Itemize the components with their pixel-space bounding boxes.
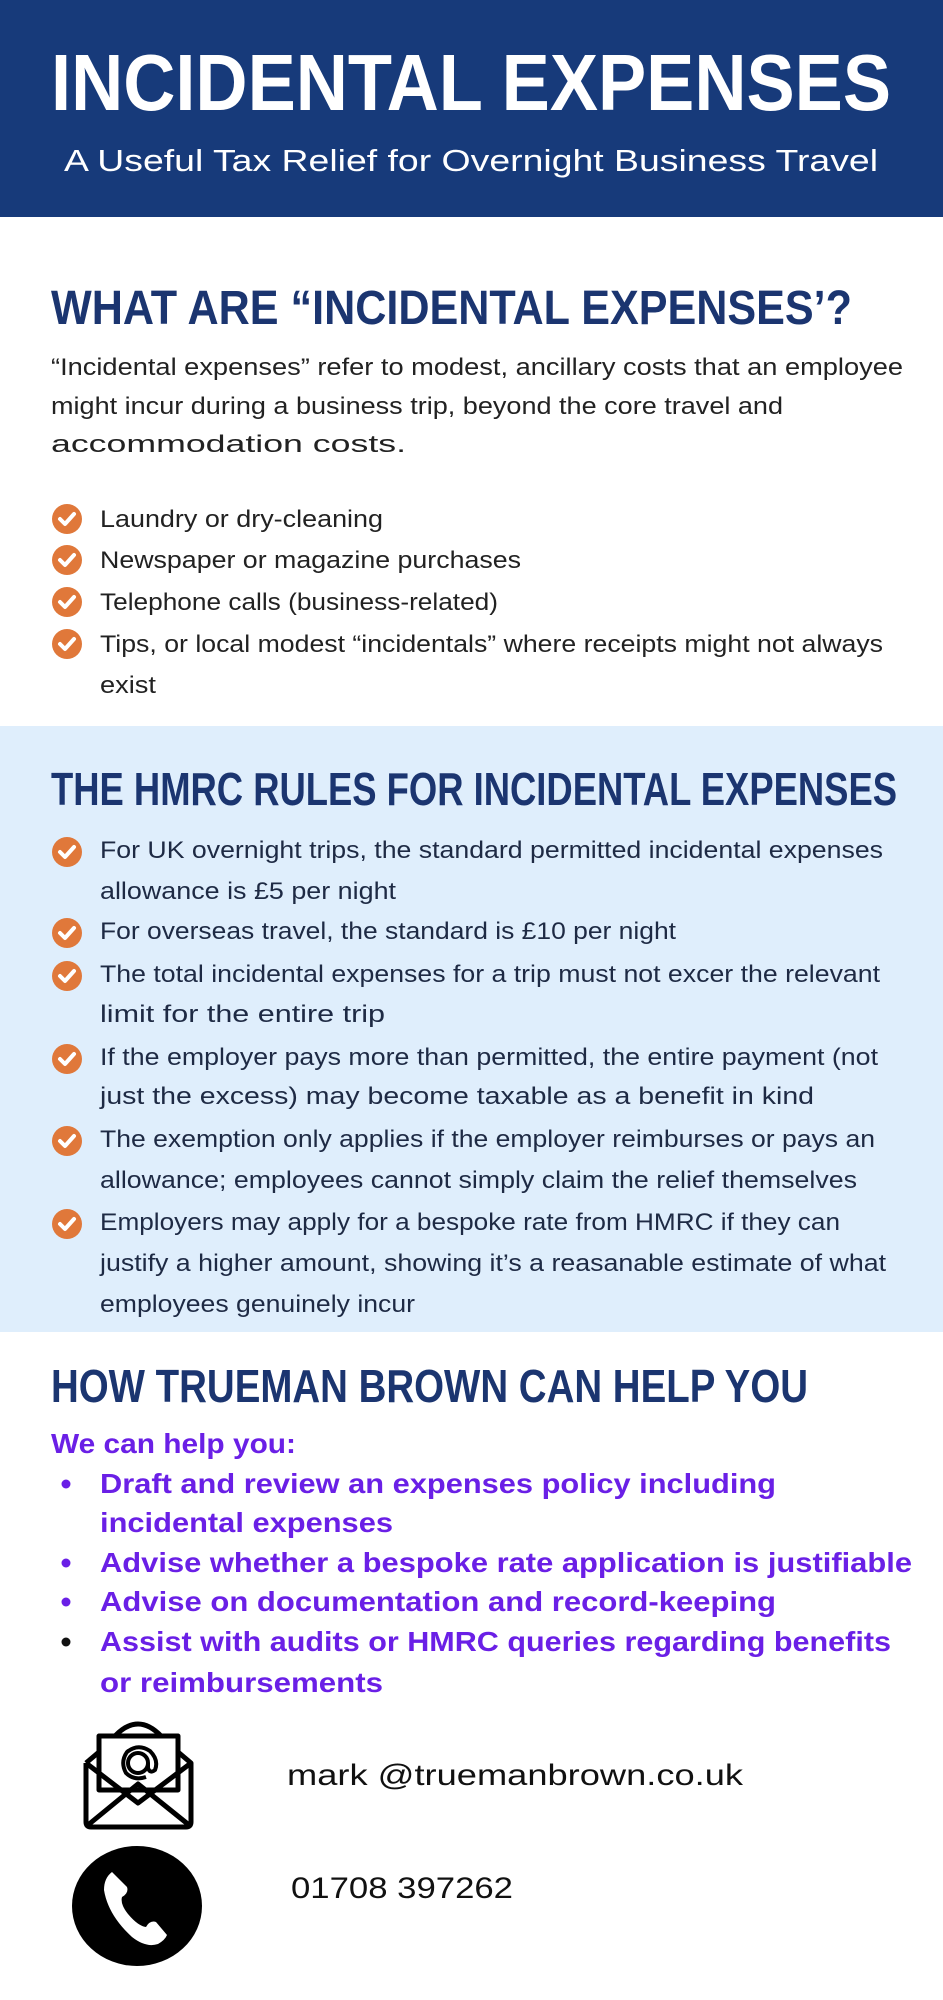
intro: We can help you: xyxy=(51,1428,296,1459)
rules list: Employers may apply for a bespoke rate from HMRC if they can xyxy=(100,1209,840,1236)
phone number: 01708 397262 xyxy=(291,1872,513,1905)
paragraph xyxy=(51,354,903,458)
services list: Advise on documentation and record-keeping xyxy=(100,1586,776,1617)
paragraph: accommodation costs. xyxy=(51,431,406,458)
section: what are incidental expenses xyxy=(51,282,903,699)
services list: incidental expenses xyxy=(100,1507,393,1538)
services list: Assist with audits or HMRC queries regarding benefits xyxy=(100,1626,891,1657)
rules list: justify a higher amount, showing it’s a reasanable estimate of what xyxy=(99,1250,886,1277)
section: how Trueman Brown can help xyxy=(51,1360,912,1698)
services list xyxy=(62,1468,912,1698)
rules list: For overseas travel, the standard is £10 per night xyxy=(100,918,676,945)
paragraph: “Incidental expenses” refer to modest, ancillary costs that an employee xyxy=(51,354,903,381)
rules list: allowance; employees cannot simply claim the relief themselves xyxy=(100,1167,857,1194)
rules list: limit for the entire trip xyxy=(100,1001,385,1028)
checklist: Newspaper or magazine purchases xyxy=(100,547,521,574)
services list: or reimbursements xyxy=(100,1667,383,1698)
rules list: The total incidental expenses for a trip must not excer the relevant xyxy=(100,961,880,988)
rules list: just the excess) may become taxable as a benefit in kind xyxy=(99,1083,814,1110)
checklist: Laundry or dry-cleaning xyxy=(100,506,383,533)
icon: email envelope xyxy=(86,1724,191,1827)
header banner xyxy=(0,0,943,217)
rules list: If the employer pays more than permitted, the entire payment (not xyxy=(100,1044,878,1071)
rules list: employees genuinely incur xyxy=(100,1291,415,1318)
rules list xyxy=(52,837,886,1318)
paragraph: might incur during a business trip, beyond the core travel and xyxy=(51,393,783,420)
checklist: exist xyxy=(100,672,156,699)
services list: Advise whether a bespoke rate application is justifiable xyxy=(100,1547,912,1578)
heading: HOW TRUEMAN BROWN CAN HELP YOU xyxy=(51,1360,808,1412)
checklist xyxy=(52,504,883,699)
email address: mark @truemanbrown.co.uk xyxy=(287,1759,744,1792)
subtitle: A Useful Tax Relief for Overnight Business Travel xyxy=(64,143,878,178)
checklist: Telephone calls (business-related) xyxy=(100,589,498,616)
services list: Draft and review an expenses policy including xyxy=(100,1468,776,1499)
checklist: Tips, or local modest “incidentals” where receipts might not always xyxy=(100,631,883,658)
rules list: For UK overnight trips, the standard permitted incidental expenses xyxy=(100,837,883,864)
rules list: The exemption only applies if the employer reimburses or pays an xyxy=(100,1126,875,1153)
heading: WHAT ARE “INCIDENTAL EXPENSES’? xyxy=(51,282,852,335)
icon: phone xyxy=(72,1846,202,1966)
rules list: allowance is £5 per night xyxy=(100,878,396,905)
panel: HMRC rules xyxy=(0,726,943,1332)
